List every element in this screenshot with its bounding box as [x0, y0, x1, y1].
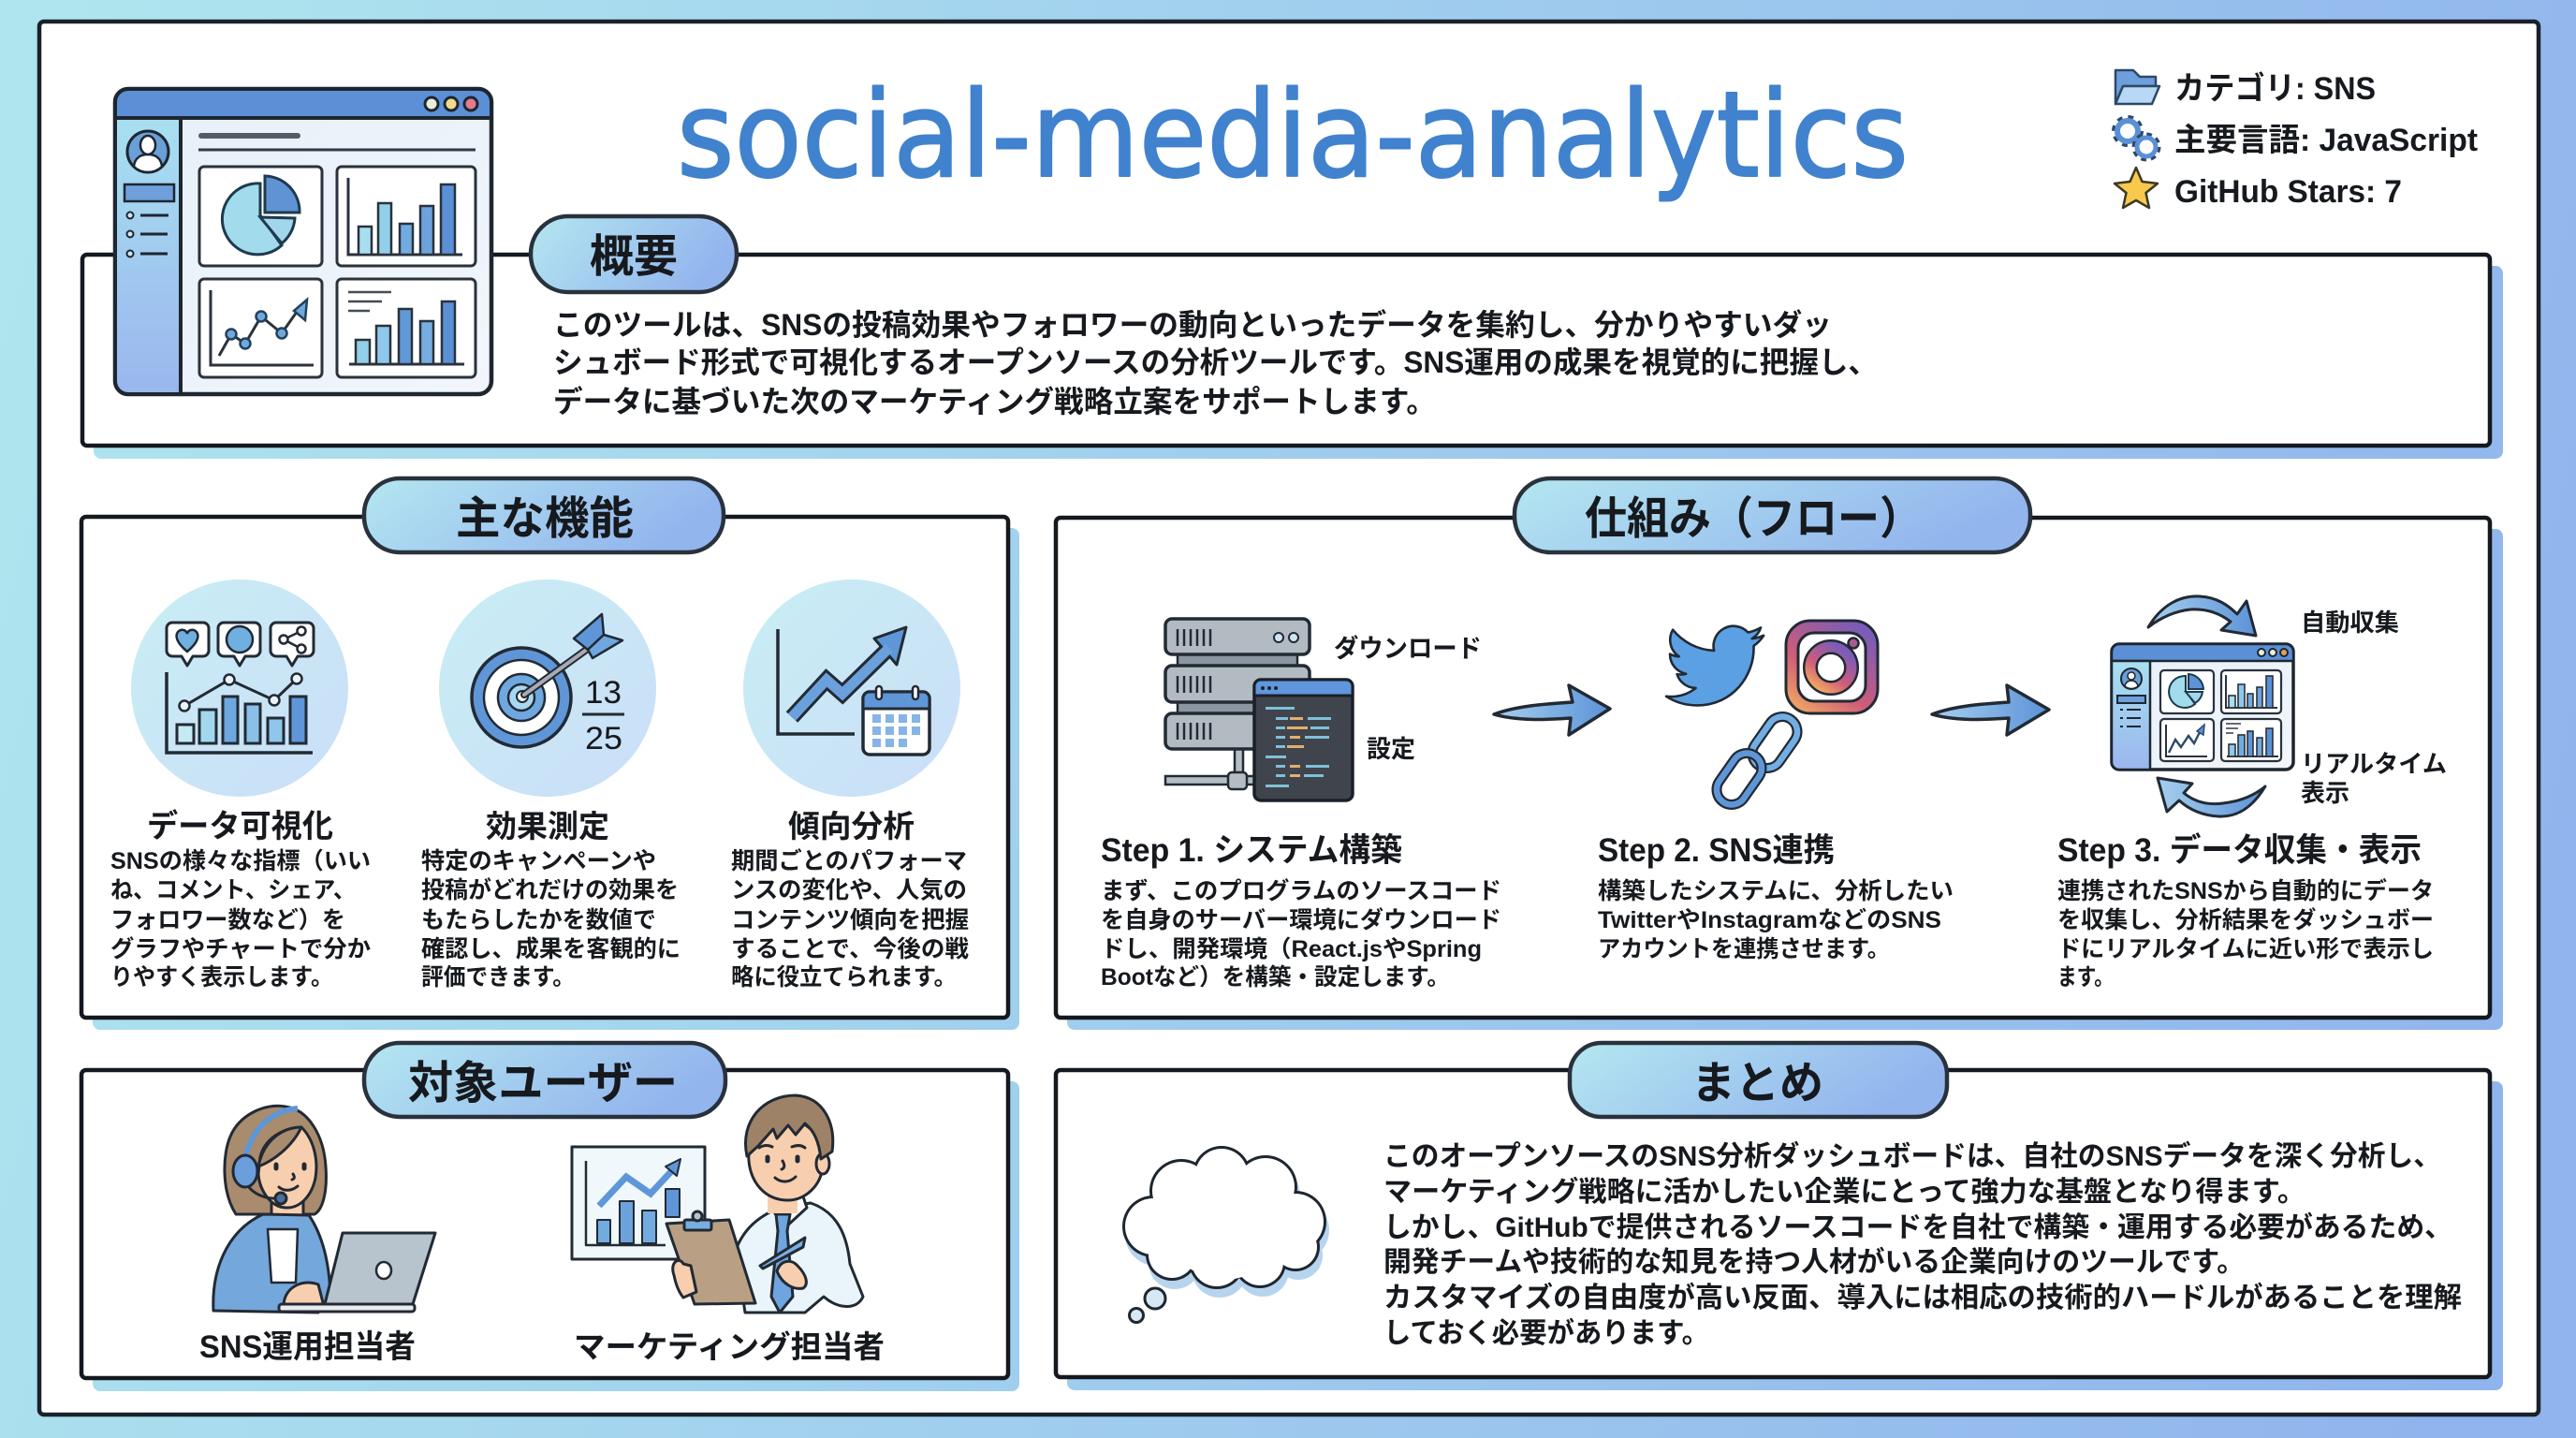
- icon: charts and social reactions: [131, 580, 348, 797]
- feature 3 text: ンスの変化や、人気の: [731, 877, 967, 903]
- meta info: [2115, 70, 2478, 210]
- overview heading pill: [531, 216, 737, 292]
- panel: how it works flow: [1056, 478, 2503, 1030]
- step 1 text: まず、このプログラムのソースコード: [1101, 877, 1501, 904]
- overview text: データに基づいた次のマーケティング戦略立案をサポートします。: [553, 385, 1436, 418]
- overview text: [553, 308, 1878, 418]
- step 2 text: TwitterやInstagramなどのSNS: [1598, 907, 1941, 933]
- feature 1 heading: データ可視化: [147, 808, 333, 844]
- label: marketer: マーケティング担当者: [574, 1329, 885, 1364]
- step 3 text: ドにリアルタイムに近い形で表示し: [2057, 936, 2434, 962]
- summary text: カスタマイズの自由度が高い反面、導入には相応の技術的ハードルがあることを理解: [1383, 1282, 2462, 1313]
- icon: instagram: [1786, 621, 1878, 713]
- icon: thought cloud: [1122, 1146, 1329, 1322]
- feature 1 text: フォロワー数など）を: [110, 907, 345, 933]
- target users heading pill: 対象ユーザー: [408, 1059, 678, 1108]
- feature 2 text: 特定のキャンペーンや: [421, 848, 656, 874]
- feature 2 text: [421, 848, 681, 990]
- summary text: 開発チームや技術的な知見を持つ人材がいる企業向けのツールです。: [1383, 1246, 2245, 1278]
- features heading pill: 主な機能: [456, 494, 634, 544]
- download label: ダウンロード: [1334, 634, 1482, 663]
- icon: server with code window: [1165, 619, 1353, 800]
- step 1 text: [1101, 877, 1501, 990]
- step 1 text: を自身のサーバー環境にダウンロード: [1101, 906, 1501, 933]
- feature 1 text: SNSの様々な指標（いい: [110, 848, 371, 874]
- panel: target users: [81, 1043, 1019, 1391]
- feature 1 text: ね、コメント、シェア、: [110, 877, 356, 903]
- step 1 text: ドし、開発環境（React.jsやSpring: [1101, 936, 1482, 962]
- feature 3 text: 期間ごとのパフォーマ: [731, 847, 967, 874]
- feature 3 text: コンテンツ傾向を把握: [731, 907, 969, 933]
- step 2 heading: Step 2. SNS連携: [1598, 832, 1835, 869]
- icon: small dashboard: [2112, 644, 2293, 770]
- panel: features: [81, 478, 1019, 1030]
- flow heading pill: [1515, 478, 2030, 552]
- auto collect label: 自動収集: [2301, 609, 2399, 637]
- feature 1 text: グラフやチャートで分か: [110, 935, 371, 962]
- icon: dashboard window: [115, 89, 491, 394]
- feature 2 text: 評価できます。: [421, 964, 575, 990]
- title: social-media-analytics: [677, 66, 1909, 204]
- step 2 text: 構築したシステムに、分析したい: [1598, 878, 1954, 904]
- summary text: [1383, 1140, 2462, 1349]
- icon: target with arrow: 25: [585, 721, 622, 756]
- feature 1 text: [110, 848, 371, 990]
- step 2 text: [1598, 878, 1954, 962]
- summary text: このオープンソースのSNS分析ダッシュボードは、自社のSNSデータを深く分析し、: [1383, 1140, 2441, 1172]
- realtime label: 表示: [2301, 779, 2349, 807]
- step 1: [1101, 619, 1501, 990]
- icon: chain link: [1711, 711, 1803, 811]
- icon: star: [2115, 168, 2158, 208]
- feature 3: trend analysis: [731, 580, 969, 990]
- figure: SNS manager with headset and laptop: [213, 1106, 435, 1313]
- summary text: しておく必要があります。: [1383, 1317, 1709, 1349]
- feature 2 text: もたらしたかを数値で: [421, 907, 656, 933]
- icon: curved arrow, realtime display: [2158, 778, 2265, 816]
- summary heading pill: [1570, 1043, 1947, 1117]
- setup label: 設定: [1367, 735, 1415, 763]
- icon: gears: [2115, 119, 2158, 158]
- step 3 text: [2057, 877, 2434, 990]
- summary text: マーケティング戦略に活かしたい企業にとって強力な基盤となり得ます。: [1383, 1177, 2305, 1208]
- realtime label: リアルタイム: [2301, 750, 2447, 778]
- icon: target with arrow: [439, 580, 656, 797]
- feature 3 text: することで、今後の戦: [731, 936, 969, 962]
- step 3 text: ます。: [2057, 964, 2114, 990]
- language text: 主要言語: JavaScript: [2174, 123, 2478, 158]
- feature 2: effect measurement: [421, 580, 681, 990]
- summary text: しかし、GitHubで提供されるソースコードを自社で構築・運用する必要があるため、: [1383, 1211, 2452, 1243]
- feature 2 text: 確認し、成果を客観的に: [421, 936, 681, 962]
- summary heading pill: まとめ: [1691, 1059, 1823, 1108]
- step 2: [1598, 621, 1954, 962]
- icon: folder: [2115, 70, 2159, 104]
- overview text: シュボード形式で可視化するオープンソースの分析ツールです。SNS運用の成果を視覚的に把握し、: [553, 345, 1878, 379]
- step 1 heading: Step 1. システム構築: [1101, 832, 1402, 869]
- feature 2 text: 投稿がどれだけの効果を: [421, 876, 679, 903]
- feature 2 heading: 効果測定: [486, 809, 609, 844]
- step 3 heading: Step 3. データ収集・表示: [2057, 831, 2422, 869]
- overview text: このツールは、SNSの投稿効果やフォロワーの動向といったデータを集約し、分かりやすいダッ: [553, 308, 1832, 342]
- flow heading pill: 仕組み（フロー）: [1585, 494, 1922, 544]
- feature 3 heading: 傾向分析: [788, 809, 915, 844]
- feature 1: data visualization: [110, 580, 371, 990]
- figure: marketer with chart and clipboard: [572, 1095, 863, 1313]
- realtime label: [2301, 750, 2447, 807]
- panel: overview: [82, 216, 2503, 459]
- stars text: GitHub Stars: 7: [2174, 174, 2402, 210]
- icon: twitter bird: [1666, 626, 1764, 705]
- icon: target with arrow: 13: [585, 675, 622, 711]
- panel: summary: [1056, 1043, 2503, 1390]
- target users heading pill: [364, 1043, 725, 1117]
- step 3 text: 連携されたSNSから自動的にデータ: [2057, 877, 2434, 904]
- category text: カテゴリ: SNS: [2174, 70, 2376, 107]
- step 3: [2057, 596, 2447, 990]
- overview heading pill: 概要: [590, 232, 678, 282]
- step 1 text: Bootなど）を構築・設定します。: [1101, 964, 1450, 990]
- label: SNS manager: SNS運用担当者: [199, 1329, 416, 1365]
- feature 3 text: 略に役立てられます。: [731, 964, 957, 990]
- arrow: step 1 to step 2: [1494, 685, 1610, 735]
- icon: trend chart and calendar: [743, 580, 960, 797]
- arrow: step 2 to step 3: [1932, 685, 2049, 735]
- feature 1 text: りやすく表示します。: [110, 964, 333, 990]
- icon: curved arrow, auto collect: [2148, 596, 2256, 636]
- features heading pill: [364, 478, 724, 552]
- step 3 text: を収集し、分析結果をダッシュボー: [2057, 906, 2434, 933]
- step 2 text: アカウントを連携させます。: [1598, 936, 1890, 962]
- feature 3 text: [731, 847, 969, 990]
